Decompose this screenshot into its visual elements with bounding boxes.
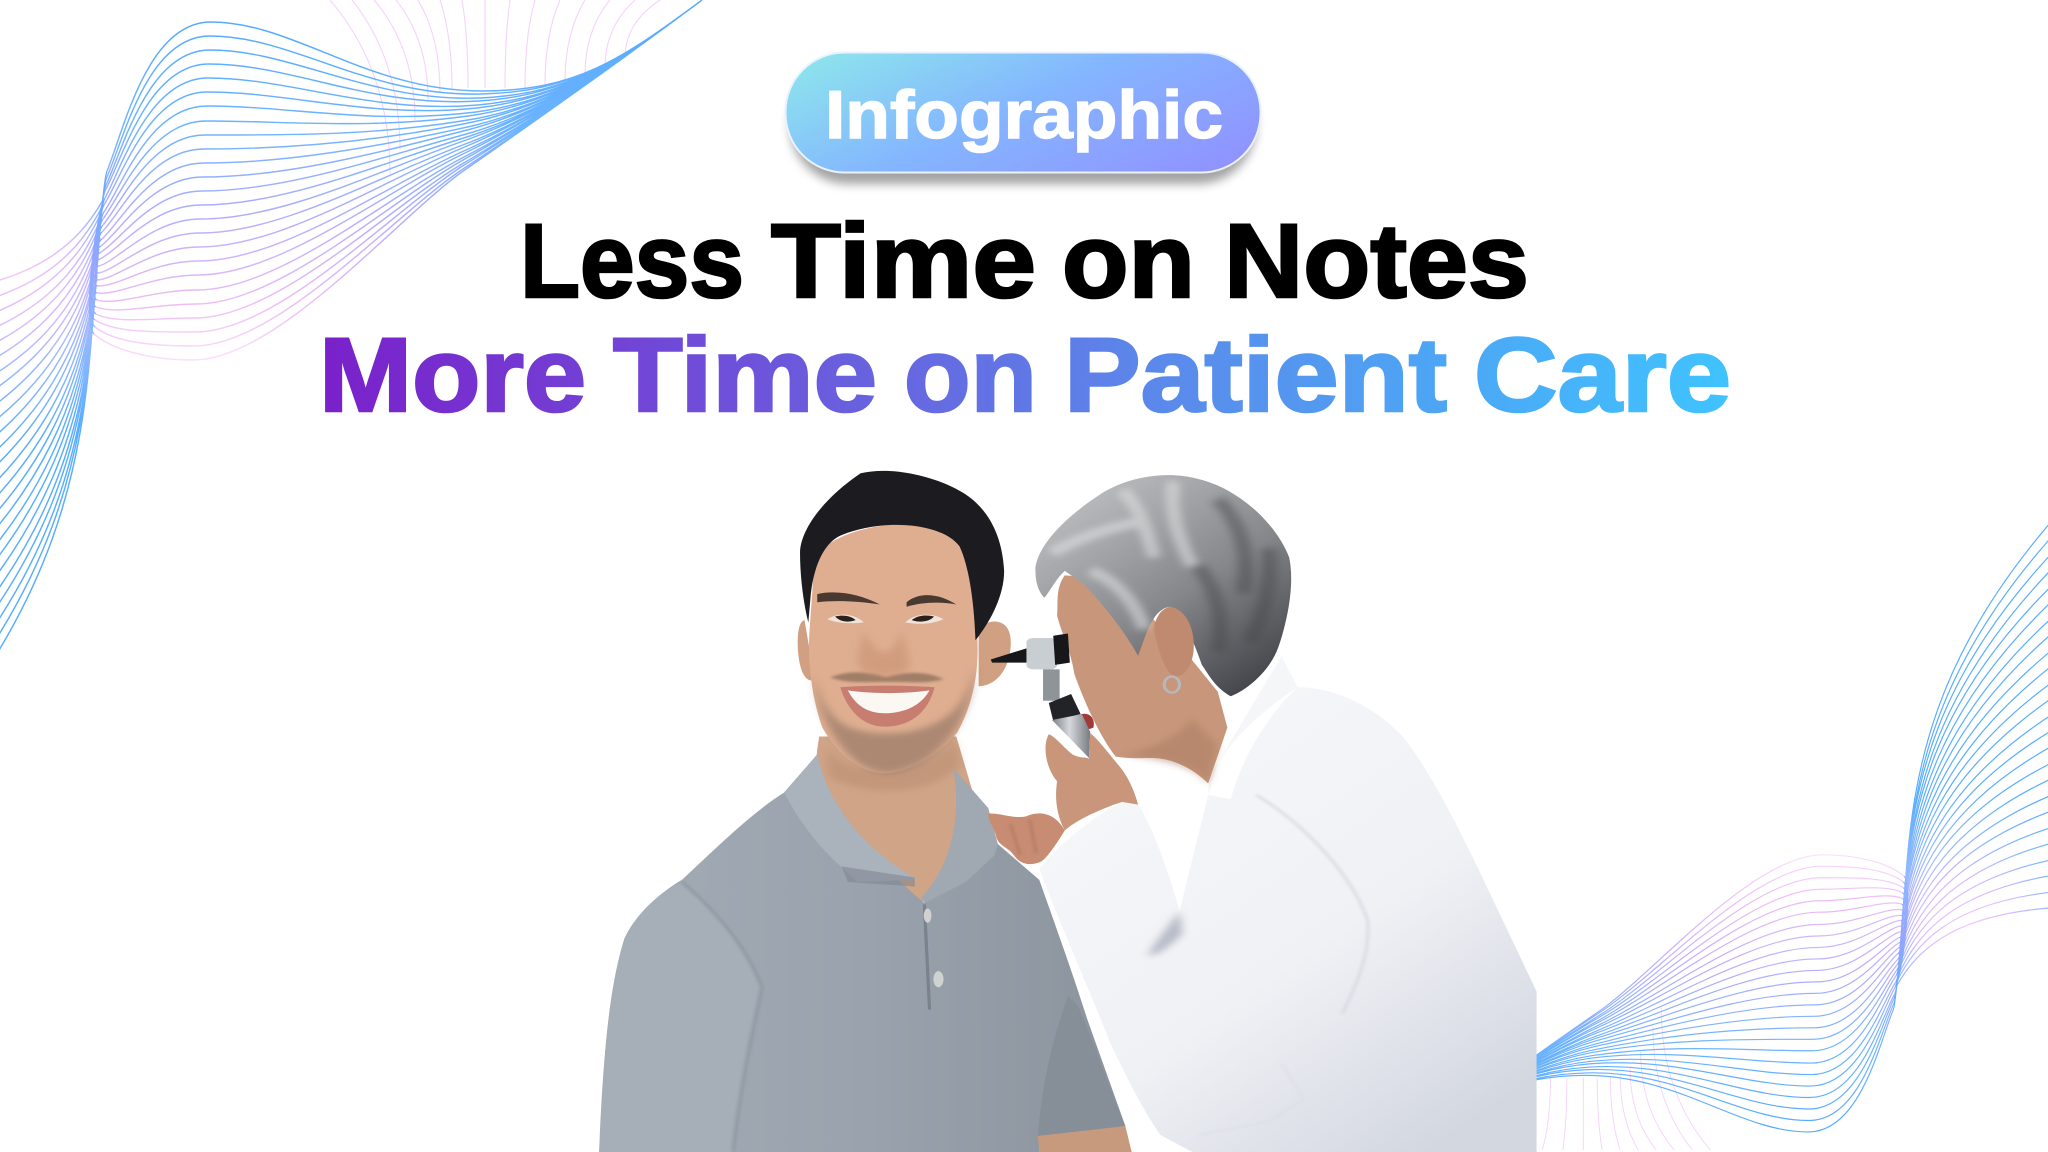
otoscope: head — [1026, 638, 1057, 669]
patient: hair — [800, 471, 1004, 640]
doctor: neck and face — [1057, 575, 1227, 784]
title line 1: on — [1062, 203, 1195, 320]
patient: stubble — [813, 665, 977, 773]
title line 2 — [319, 317, 1731, 434]
patient: eyes — [827, 615, 944, 624]
otoscope: dark collar — [1049, 694, 1081, 721]
title line 2: on — [904, 317, 1037, 434]
otoscope: speculum — [991, 648, 1031, 663]
otoscope: handle — [1052, 714, 1090, 758]
decorative wave: top left — [0, 0, 702, 762]
patient: polo shirt — [599, 754, 1125, 1152]
patient: arms — [1038, 1126, 1132, 1152]
doctor: ear — [1154, 607, 1194, 676]
patient: nose — [858, 637, 910, 676]
patient: eyebrows — [817, 592, 956, 607]
otoscope — [991, 634, 1090, 758]
title line 1: Notes — [1224, 203, 1529, 320]
doctor: grey hair — [1035, 475, 1291, 696]
doctor: hand on patient's shoulder — [988, 813, 1065, 864]
patient: shirt buttons — [924, 908, 944, 987]
doctor: hoop earring — [1164, 677, 1180, 693]
patient: head — [798, 471, 1011, 773]
title line 2: Patient — [1064, 317, 1447, 434]
photo: doctor examining a smiling patient's ear with an otoscope — [599, 471, 1537, 1152]
title line 2: Time — [613, 317, 877, 434]
doctor: hand holding otoscope — [1046, 733, 1138, 831]
title line 2: More — [319, 317, 586, 434]
patient: smile — [840, 686, 935, 727]
decorative wave: bottom right — [1536, 524, 2048, 1150]
title line 2: Care — [1474, 317, 1731, 434]
title line 1 — [520, 203, 1529, 320]
patient: neck — [816, 737, 972, 907]
doctor: mouth — [1081, 714, 1094, 730]
title line 1: Less — [520, 203, 744, 320]
patient: face — [809, 524, 978, 773]
badge: Infographic pill: Infographic — [825, 77, 1223, 153]
otoscope: neck — [1043, 669, 1060, 701]
badge: Infographic pill — [786, 52, 1260, 184]
title line 1: Time — [771, 203, 1036, 320]
doctor: lab coat — [1039, 656, 1537, 1152]
patient: ears — [798, 620, 1011, 686]
